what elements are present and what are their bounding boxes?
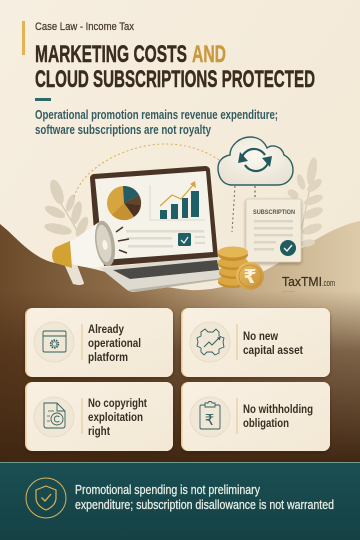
laptop screen xyxy=(95,171,213,260)
laptop base xyxy=(100,256,222,292)
title xyxy=(35,41,315,93)
card text xyxy=(243,402,313,430)
card text: platform xyxy=(88,350,128,364)
subtitle xyxy=(35,107,278,137)
handle xyxy=(65,262,84,285)
card text: exploitation xyxy=(88,410,143,424)
text lines on screen xyxy=(126,230,205,248)
icon: megaphone xyxy=(52,219,129,285)
footer banner xyxy=(0,462,360,540)
title: AND xyxy=(192,41,226,68)
icon: gear with trend xyxy=(190,322,230,362)
title divider xyxy=(35,98,51,101)
category label: Case Law - Income Tax xyxy=(35,21,134,33)
card text: capital asset xyxy=(243,343,303,357)
card text: right xyxy=(88,424,110,438)
keyboard xyxy=(113,260,219,279)
brand logo: .com xyxy=(322,278,335,288)
card text: Already xyxy=(88,322,124,336)
icon: rupee clipboard xyxy=(190,397,230,437)
brand logo xyxy=(282,274,335,292)
card text: No copyright xyxy=(88,396,147,410)
subtitle: Operational promotion remains revenue expenditure; xyxy=(35,107,278,122)
card text: No new xyxy=(243,329,279,343)
pie chart xyxy=(107,186,141,220)
subscription document: SUBSCRIPTION xyxy=(253,209,295,216)
cone xyxy=(70,222,104,267)
icon: left leaves xyxy=(43,178,91,252)
laptop bezel xyxy=(90,166,218,266)
checkbox xyxy=(178,233,191,246)
icon: coins: ₹ xyxy=(243,266,257,288)
icon: right leaves xyxy=(286,156,324,252)
footer text: Promotional spending is not preliminary xyxy=(75,483,261,497)
card text: operational xyxy=(88,336,141,350)
illustration: laptop xyxy=(90,166,222,292)
sound lines xyxy=(116,227,129,253)
dashed connector arc xyxy=(74,144,222,197)
icon: browser gear xyxy=(34,322,74,362)
icon: coins xyxy=(218,246,264,290)
card: already operational platform xyxy=(25,308,173,377)
brand logo: TaxTMI xyxy=(282,274,322,289)
icon: rupee clipboard: ₹ xyxy=(205,411,214,429)
card: no withholding obligation xyxy=(181,382,330,451)
icon: shield check xyxy=(26,478,66,518)
gold back xyxy=(52,241,72,268)
card: no new capital asset xyxy=(181,308,330,377)
icon: cloud sync xyxy=(218,137,293,185)
line and bar chart xyxy=(150,181,205,220)
header accent bar xyxy=(22,21,25,55)
rupee coin xyxy=(236,262,264,290)
card text xyxy=(88,396,147,438)
subtitle: software subscriptions are not royalty xyxy=(35,122,212,137)
background hills xyxy=(0,221,360,470)
flare xyxy=(92,219,118,268)
title: MARKETING COSTS xyxy=(35,41,187,68)
card text: obligation xyxy=(243,416,289,430)
subscription document xyxy=(246,199,301,262)
card text xyxy=(243,329,303,357)
check badge xyxy=(280,240,296,256)
card text xyxy=(88,322,141,364)
card: no copyright exploitation right xyxy=(25,382,173,451)
card text: No withholding xyxy=(243,402,313,416)
cloud connector lines xyxy=(232,186,255,232)
icon: copyright document xyxy=(34,397,74,437)
